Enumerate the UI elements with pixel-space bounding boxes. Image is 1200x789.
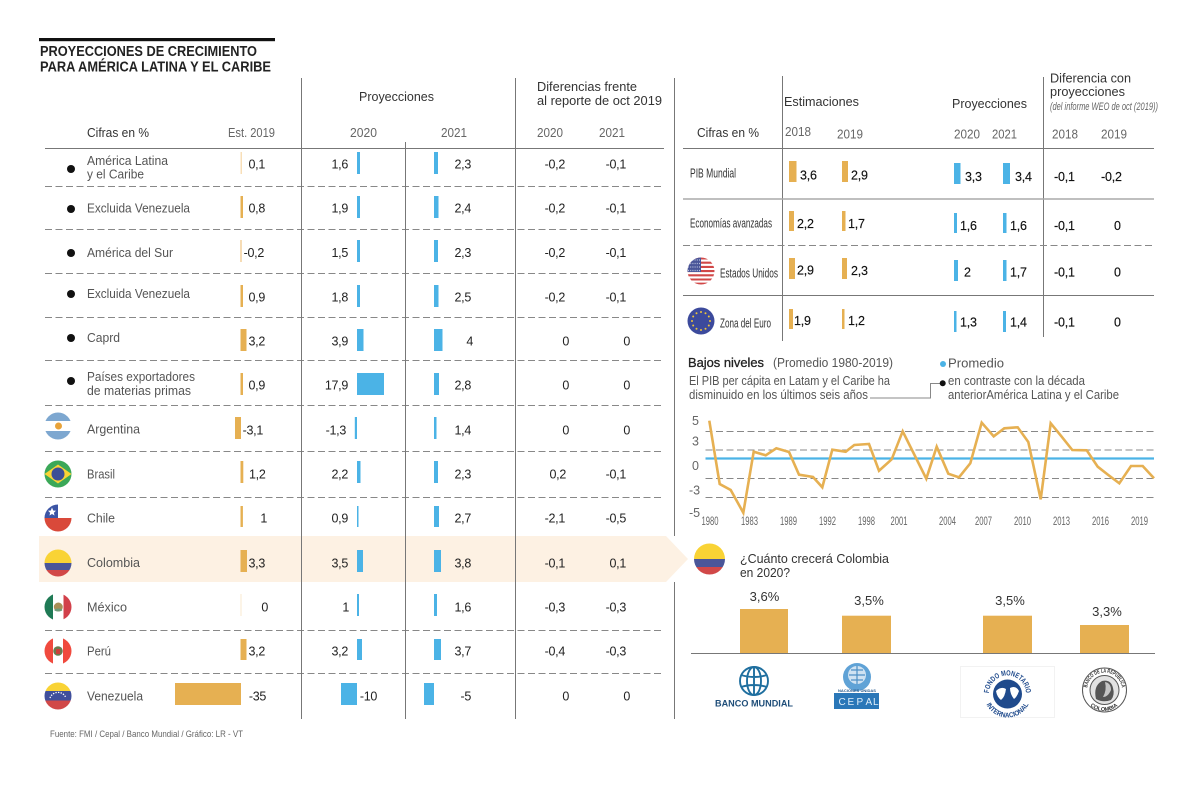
x axis labels: 2007	[975, 516, 992, 528]
row: Estados Unidos: 2,9	[797, 264, 814, 278]
row: Colombia: 0,1	[610, 556, 626, 570]
logo: Fondo Monetario Internacional	[960, 666, 1055, 718]
line chart	[689, 414, 1154, 528]
row: PIB Mundial: -0,1	[1054, 170, 1075, 184]
table grid: right table	[674, 76, 1154, 719]
row: América del Sur: 2,3	[455, 246, 471, 260]
row: Estados Unidos: 1,7	[1010, 266, 1027, 280]
row: Colombia: 3,3	[249, 556, 265, 570]
row: América Latina y el Caribe: 0,1	[249, 158, 265, 172]
row: Zona del Euro: -0,1	[1054, 316, 1075, 330]
right table header: Estimaciones	[784, 95, 859, 109]
row: México: -0,3	[545, 600, 565, 614]
row: Excluida Venezuela (América del Sur): -0,1	[606, 290, 626, 304]
row: América Latina y el Caribe: -0,2	[545, 158, 565, 172]
row: PIB Mundial	[690, 161, 1122, 184]
row: Venezuela: 0	[562, 690, 569, 704]
bar chart: 3,5%	[854, 593, 884, 608]
row: Países exportadores de materias primas: 17,9	[325, 378, 348, 392]
left table header: 2021	[441, 126, 467, 140]
row: Colombia: Colombia	[87, 556, 140, 570]
y axis labels: -3	[689, 484, 700, 498]
right table header: 2018	[1052, 128, 1078, 142]
logo: Banco de la República: BANCO DE LA REPUBLICA	[1084, 668, 1126, 688]
row: Excluida Venezuela (América del Sur): -0,2	[545, 290, 565, 304]
logo: CEPAL: CEPAL	[838, 697, 879, 708]
row: Chile: 2,7	[455, 512, 471, 526]
row: Brasil: 1,2	[249, 468, 266, 482]
row: Chile: 0,9	[332, 512, 348, 526]
row: Excluida Venezuela: -0,1	[606, 202, 626, 216]
x axis labels: 1998	[858, 516, 875, 528]
row: Excluida Venezuela: 1,9	[332, 202, 348, 216]
row: México: México	[87, 600, 127, 614]
legend: Promedio: Promedio	[948, 356, 1004, 370]
row: México: -0,3	[606, 600, 626, 614]
row: Venezuela: -5	[460, 690, 471, 704]
y axis labels	[689, 414, 700, 520]
row: Brasil: -0,1	[606, 468, 626, 482]
heading: Colombia question: ¿Cuánto crecerá Colombia	[740, 551, 890, 566]
row: Caprd: 0	[623, 334, 630, 348]
row: PIB Mundial: 3,3	[965, 170, 982, 184]
row: Colombia: 3,5	[332, 556, 348, 570]
row: Zona del Euro: 1,9	[794, 314, 811, 328]
row: Venezuela: 0	[623, 690, 630, 704]
row: Países exportadores de materias primas: 0	[562, 378, 569, 392]
row: América Latina y el Caribe: América Latina	[87, 154, 168, 168]
row: Países exportadores de materias primas: 0,9	[249, 378, 265, 392]
row: Perú: 3,7	[455, 644, 471, 658]
y axis labels: -5	[689, 506, 700, 520]
left table header: Proyecciones	[359, 90, 434, 104]
row: Brasil: 2,3	[455, 468, 471, 482]
row: Economías avanzadas	[690, 211, 1121, 233]
row: América del Sur: -0,1	[606, 246, 626, 260]
row: América del Sur: 1,5	[332, 246, 348, 260]
row: Excluida Venezuela: Excluida Venezuela	[87, 202, 190, 216]
row: PIB Mundial: 3,6	[800, 168, 817, 182]
row: Estados Unidos: -0,1	[1054, 266, 1075, 280]
row: PIB Mundial: PIB Mundial	[690, 166, 736, 180]
row: Caprd: 4	[466, 334, 473, 348]
left table header: 2020	[537, 126, 563, 140]
row: Economías avanzadas: 1,6	[1010, 219, 1027, 233]
left table header: Cifras en %	[87, 126, 149, 140]
left table header: 2020	[350, 126, 377, 140]
table grid: left table	[45, 78, 664, 719]
y axis labels: 5	[692, 414, 699, 428]
row: Colombia: -0,1	[545, 556, 565, 570]
row: Perú: 3,2	[249, 644, 265, 658]
title: PROYECCIONES DE CRECIMIENTO	[40, 44, 257, 60]
row: América del Sur: América del Sur	[87, 246, 173, 260]
row: Excluida Venezuela (América del Sur): Excluida Venezuela	[87, 287, 190, 301]
row: México	[44, 593, 626, 621]
x axis labels: 1980	[702, 516, 718, 528]
row: Argentina: Argentina	[87, 422, 140, 436]
row: PIB Mundial: 2,9	[851, 168, 868, 182]
row: Excluida Venezuela: 2,4	[455, 202, 471, 216]
row: Caprd: 3,9	[332, 334, 348, 348]
row: Chile	[44, 504, 626, 532]
row: Economías avanzadas: 1,7	[848, 217, 865, 231]
row: Venezuela: -35	[249, 690, 266, 704]
row: Colombia: 3,8	[455, 556, 471, 570]
row: Zona del Euro: 1,2	[848, 314, 865, 328]
row: América Latina y el Caribe: 2,3	[455, 158, 471, 172]
right table header: Cifras en %	[697, 126, 759, 140]
row: Brasil	[44, 460, 626, 488]
left table header: Diferencias frente	[537, 80, 637, 94]
row: Argentina: 1,4	[455, 424, 471, 438]
row: Excluida Venezuela (América del Sur): 2,5	[455, 290, 471, 304]
row: Estados Unidos: 2	[964, 266, 971, 280]
right table header: 2020	[954, 128, 980, 142]
row: América del Sur: -0,2	[545, 246, 565, 260]
row: Estados Unidos: Estados Unidos	[720, 266, 778, 280]
row: América Latina y el Caribe	[67, 152, 626, 182]
row: Excluida Venezuela (América del Sur)	[67, 285, 626, 307]
logo: Fondo Monetario Internacional: INTERNACIONAL	[986, 702, 1029, 718]
row: Economías avanzadas: Economías avanzadas	[690, 216, 772, 230]
row: PIB Mundial: -0,2	[1101, 170, 1122, 184]
right table header: 2021	[992, 128, 1017, 142]
row: Argentina: -1,3	[326, 424, 346, 438]
row: Excluida Venezuela (América del Sur): 1,8	[332, 290, 348, 304]
bar chart: 3,5%	[995, 593, 1025, 608]
text: left note	[689, 374, 890, 402]
text: right note: en contraste con la década	[948, 374, 1085, 388]
left table header: 2021	[599, 126, 625, 140]
left table header: al reporte de oct 2019	[537, 94, 662, 108]
row: Chile: -0,5	[606, 512, 626, 526]
text: right note	[948, 374, 1119, 402]
row: Argentina	[44, 412, 630, 440]
logo: Banco de la República	[1082, 668, 1127, 712]
row: Perú: -0,3	[606, 644, 626, 658]
row: Caprd: 3,2	[249, 334, 265, 348]
title	[39, 38, 275, 76]
row: Economías avanzadas: -0,1	[1054, 219, 1075, 233]
row: Perú: -0,4	[545, 644, 565, 658]
x axis labels: 1989	[780, 516, 797, 528]
row: Excluida Venezuela: 0,8	[249, 202, 265, 216]
right table header	[697, 72, 1158, 142]
logo: Banco Mundial	[715, 667, 793, 710]
heading: Bajos niveles: Bajos niveles	[688, 355, 764, 370]
text: left note: El PIB per cápita en Latam y el Caribe ha	[689, 374, 890, 388]
right table header: proyecciones	[1050, 85, 1125, 99]
row: Economías avanzadas: 2,2	[797, 217, 814, 231]
row: Brasil: 0,2	[550, 468, 566, 482]
source note: Fuente: FMI / Cepal / Banco Mundial / Gráfico: LR - VT	[50, 729, 243, 740]
row: Zona del Euro	[688, 308, 1121, 334]
row: América Latina y el Caribe: 1,6	[332, 158, 348, 172]
row: PIB Mundial: 3,4	[1015, 170, 1032, 184]
row: Países exportadores de materias primas: de materias primas	[87, 384, 191, 398]
row: Chile: 1	[260, 512, 267, 526]
panel: Bajos niveles	[688, 355, 1154, 528]
y axis labels: 3	[692, 434, 699, 448]
row: Países exportadores de materias primas: 0	[623, 378, 630, 392]
connector with black dot	[870, 380, 946, 398]
row: Zona del Euro: 0	[1114, 316, 1121, 330]
right table header: 2018	[785, 125, 811, 139]
right table header: Proyecciones	[952, 97, 1027, 111]
row: Chile: -2,1	[545, 512, 565, 526]
row: Zona del Euro: 1,4	[1010, 316, 1027, 330]
logo: CEPAL: NACIONES UNIDAS	[838, 689, 877, 693]
row: Venezuela: Venezuela	[87, 690, 143, 704]
row: Países exportadores de materias primas: Países exportadores	[87, 370, 195, 384]
row: Brasil: Brasil	[87, 468, 115, 482]
row: Colombia	[44, 549, 626, 577]
heading: Colombia question	[740, 551, 890, 580]
x axis labels	[702, 516, 1148, 528]
row: México: 0	[261, 600, 268, 614]
logo: Fondo Monetario Internacional: FONDO MONETARIO	[984, 670, 1031, 693]
row: Excluida Venezuela (América del Sur): 0,9	[249, 290, 265, 304]
row: Zona del Euro: 1,3	[960, 316, 977, 330]
row: Estados Unidos	[687, 257, 1121, 285]
row: Argentina: 0	[562, 424, 569, 438]
row: Países exportadores de materias primas: 2,8	[455, 378, 471, 392]
text: left note: disminuido en los últimos seis años	[689, 388, 868, 402]
row: Venezuela: -10	[360, 690, 377, 704]
row: México: 1,6	[455, 600, 471, 614]
logo: Banco de la República: COLOMBIA	[1091, 704, 1118, 712]
panel: ¿Cuánto crecerá Colombia en 2020?	[691, 544, 1155, 718]
row: Economías avanzadas: 0	[1114, 219, 1121, 233]
heading: Colombia question: en 2020?	[740, 565, 790, 580]
highlight band: Colombia row	[39, 536, 688, 582]
bar chart	[691, 589, 1155, 654]
right table header: Diferencia con	[1050, 72, 1131, 86]
row: Perú: 3,2	[332, 644, 348, 658]
row: Economías avanzadas: 1,6	[960, 219, 977, 233]
row: Zona del Euro: Zona del Euro	[720, 316, 771, 330]
row: América Latina y el Caribe: y el Caribe	[87, 168, 144, 182]
row: Chile: Chile	[87, 512, 115, 526]
y axis labels: 0	[692, 459, 699, 473]
row: Venezuela	[44, 682, 630, 710]
x axis labels: 2016	[1092, 516, 1109, 528]
row: Estados Unidos: 2,3	[851, 264, 868, 278]
row: México: 1	[342, 600, 349, 614]
left table header: Est. 2019	[228, 126, 275, 140]
x axis labels: 1992	[819, 516, 836, 528]
x axis labels: 2010	[1014, 516, 1031, 528]
x axis labels: 2001	[890, 516, 908, 528]
row: América Latina y el Caribe: -0,1	[606, 158, 626, 172]
logo: CEPAL	[834, 663, 879, 709]
row: Caprd: Caprd	[87, 331, 120, 345]
logo: Banco Mundial: BANCO MUNDIAL	[715, 699, 793, 710]
left table header	[87, 80, 662, 140]
row: Estados Unidos: 0	[1114, 266, 1121, 280]
text: right note: anteriorAmérica Latina y el Caribe	[948, 388, 1119, 402]
row: Brasil: 2,2	[332, 468, 348, 482]
x axis labels: 2013	[1053, 516, 1070, 528]
x axis labels: 2004	[939, 516, 956, 528]
right table header: 2019	[837, 128, 863, 142]
row: Excluida Venezuela	[67, 196, 626, 218]
title: PARA AMÉRICA LATINA Y EL CARIBE	[40, 58, 271, 76]
bar chart: 3,3%	[1092, 604, 1122, 619]
bar chart: 3,6%	[750, 589, 780, 604]
row: Caprd	[67, 329, 630, 351]
x axis labels: 1983	[741, 516, 758, 528]
row: América del Sur	[67, 240, 626, 262]
row: Argentina: 0	[623, 424, 630, 438]
icon: Colombia flag	[694, 543, 725, 575]
row: América del Sur: -0,2	[244, 246, 264, 260]
subheading: period: (Promedio 1980-2019)	[773, 355, 893, 370]
row: Argentina: -3,1	[243, 424, 263, 438]
row: Países exportadores de materias primas	[67, 370, 630, 398]
right table header: 2019	[1101, 128, 1127, 142]
row: Caprd: 0	[562, 334, 569, 348]
row: Perú	[44, 638, 626, 664]
row: Perú: Perú	[87, 644, 111, 658]
x axis labels: 2019	[1131, 516, 1148, 528]
row: Excluida Venezuela: -0,2	[545, 202, 565, 216]
